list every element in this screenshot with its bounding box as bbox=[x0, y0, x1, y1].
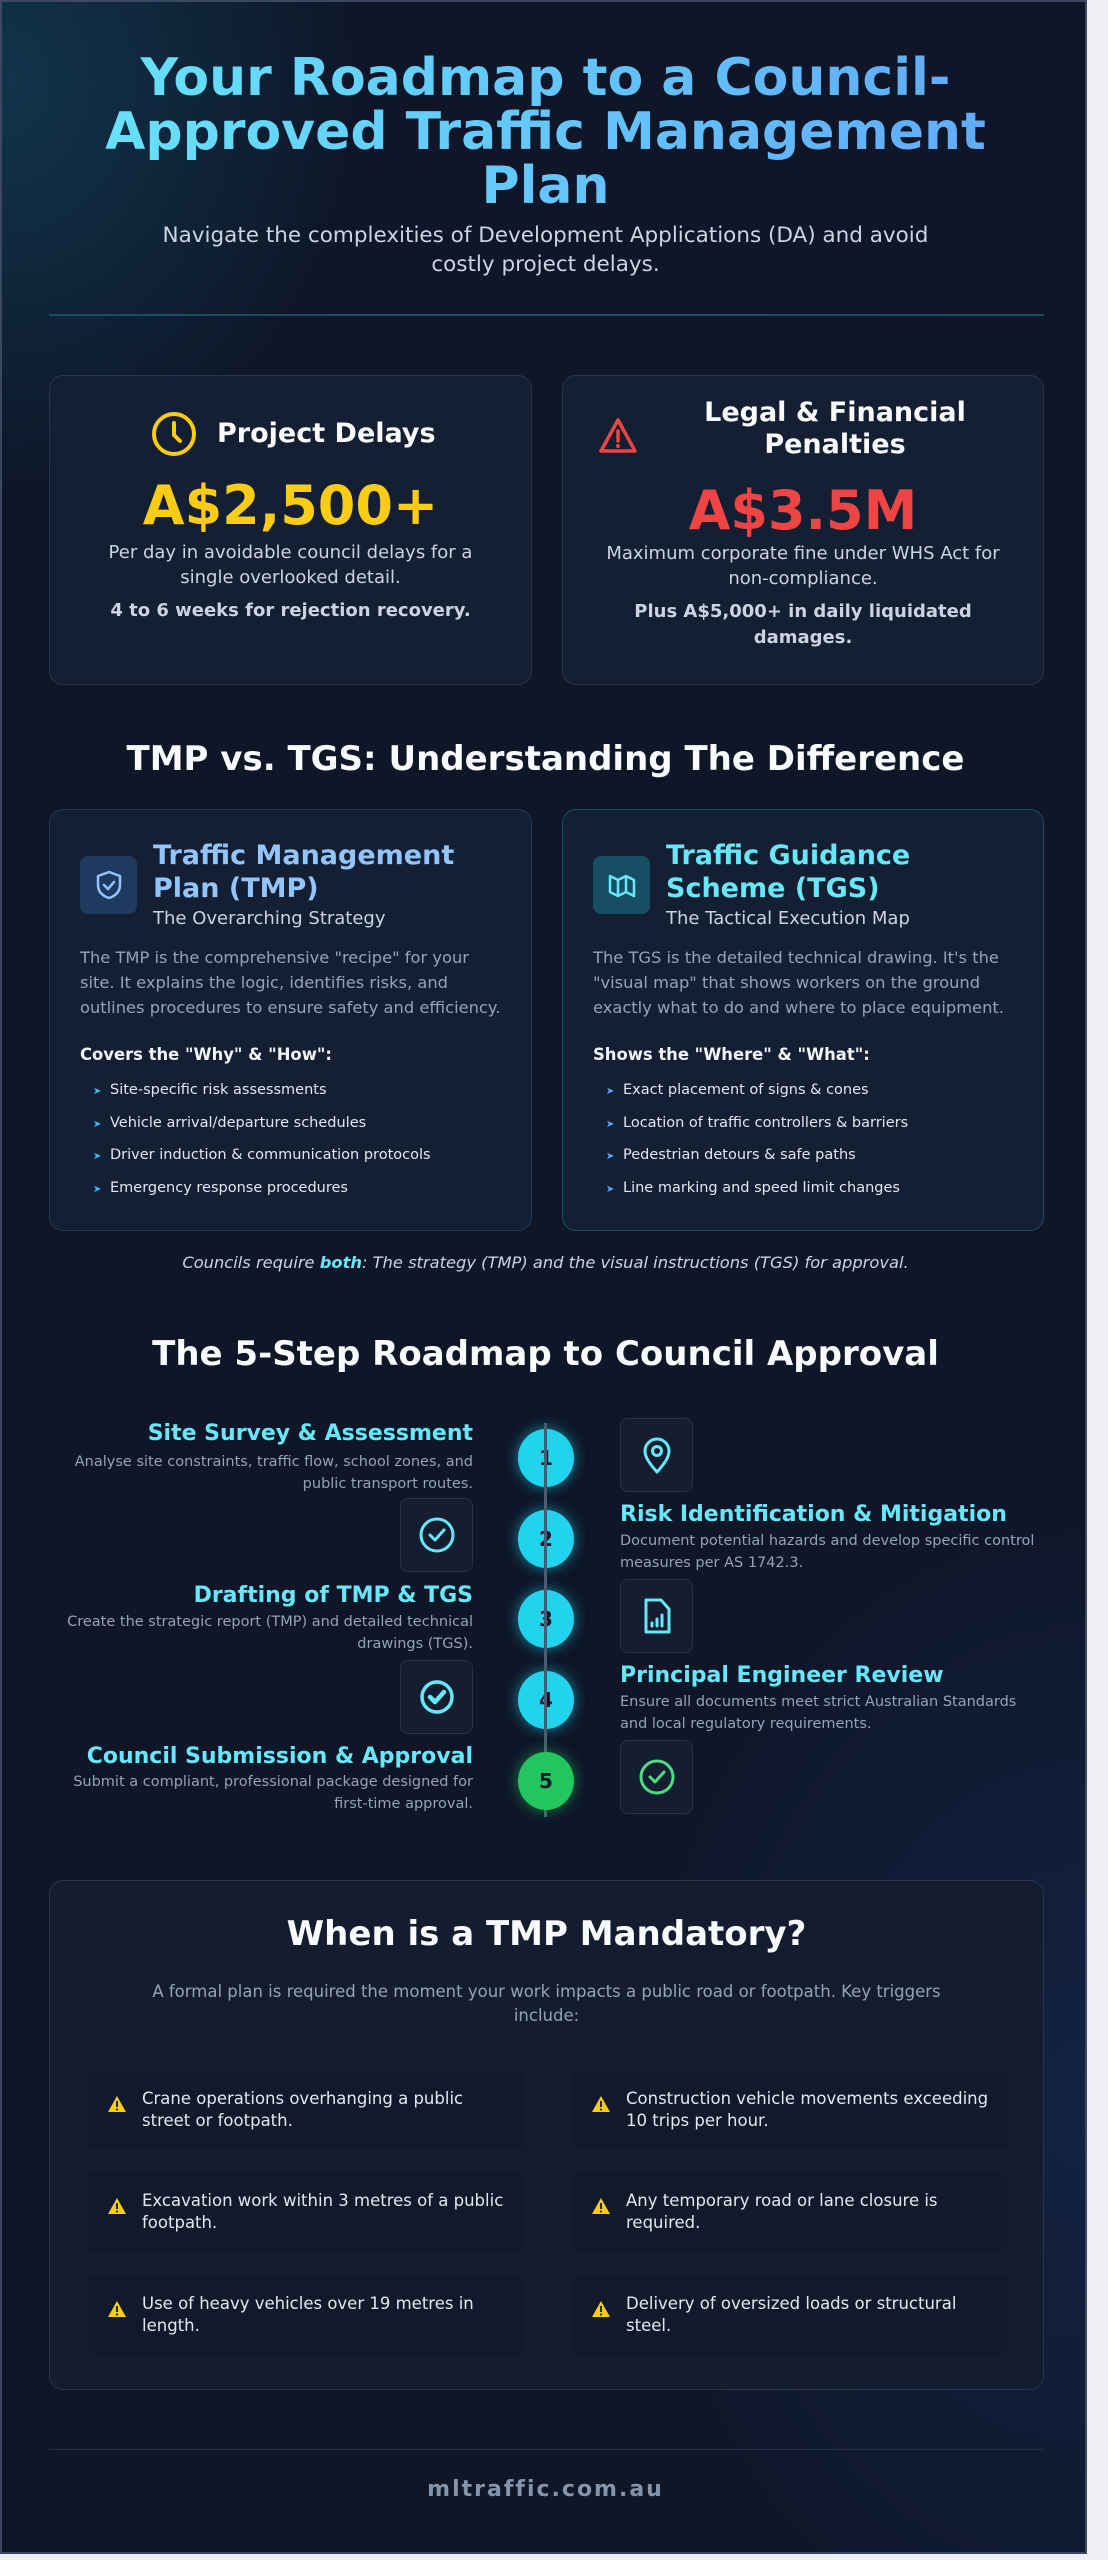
timeline bbox=[509, 1420, 583, 1818]
heading: Legal & Financial bbox=[704, 397, 966, 428]
timeline: 4 bbox=[539, 1688, 553, 1712]
title bbox=[2, 51, 1089, 213]
list: Exact placement of signs & cones bbox=[623, 1082, 869, 1098]
description: Maximum corporate fine under WHS Act for bbox=[606, 543, 1000, 564]
heading: Project Delays bbox=[217, 418, 436, 449]
trigger 5 bbox=[88, 2276, 525, 2354]
trigger 3 bbox=[88, 2173, 525, 2251]
intro bbox=[152, 1982, 941, 2025]
list: Vehicle arrival/departure schedules bbox=[110, 1115, 366, 1131]
step 2: measures per AS 1742.3. bbox=[620, 1555, 803, 1571]
trigger 1 bbox=[88, 2071, 525, 2149]
bold note: 4 to 6 weeks for rejection recovery. bbox=[110, 600, 471, 621]
list heading: Covers the "Why" & "How": bbox=[80, 1045, 332, 1064]
heading bbox=[666, 840, 910, 904]
trigger 1: street or footpath. bbox=[142, 2111, 293, 2130]
trigger 2: 10 trips per hour. bbox=[626, 2111, 769, 2130]
description bbox=[109, 542, 472, 588]
timeline: 5 bbox=[539, 1769, 553, 1793]
step circles bbox=[518, 1429, 574, 1487]
title: Plan bbox=[481, 156, 610, 216]
timeline: 2 bbox=[539, 1527, 553, 1551]
paragraph: site. It explains the logic, identifies risks, and bbox=[80, 973, 448, 992]
trigger 3: footpath. bbox=[142, 2213, 217, 2232]
icon: map bbox=[593, 856, 650, 914]
step 2 bbox=[620, 1502, 1034, 1571]
description: non-compliance. bbox=[728, 568, 878, 589]
step 3: drawings (TGS). bbox=[357, 1636, 473, 1652]
icon: green check bbox=[620, 1740, 693, 1814]
intro: A formal plan is required the moment your work impacts a public road or footpath. Key triggers bbox=[152, 1982, 941, 2001]
description bbox=[606, 543, 1000, 589]
paragraph bbox=[80, 948, 500, 1017]
bold note: damages. bbox=[754, 627, 852, 648]
list: Pedestrian detours & safe paths bbox=[623, 1147, 856, 1163]
list heading: Shows the "Where" & "What": bbox=[593, 1045, 870, 1064]
step 1: public transport routes. bbox=[303, 1476, 473, 1492]
icon: shield bbox=[80, 856, 137, 914]
step 1: Site Survey & Assessment bbox=[148, 1421, 473, 1446]
panel: TMP bbox=[49, 809, 532, 1231]
step 4: Principal Engineer Review bbox=[620, 1663, 944, 1688]
list: ➤ bbox=[93, 1086, 101, 1097]
timeline: 3 bbox=[539, 1607, 553, 1631]
footnote: Councils require both: The strategy (TMP) and the visual instructions (TGS) for approval. bbox=[182, 1253, 909, 1272]
heading: Scheme (TGS) bbox=[666, 873, 880, 904]
step 3: Drafting of TMP & TGS bbox=[194, 1583, 473, 1608]
heading: Penalties bbox=[764, 429, 906, 460]
icon: document chart bbox=[620, 1579, 693, 1653]
list: Driver induction & communication protocols bbox=[110, 1147, 431, 1163]
icon: warning bbox=[599, 418, 637, 453]
step 5: Submit a compliant, professional package designed for bbox=[73, 1774, 473, 1790]
list: Emergency response procedures bbox=[110, 1180, 348, 1196]
step 3 bbox=[67, 1583, 473, 1652]
step 4: Ensure all documents meet strict Australian Standards bbox=[620, 1694, 1016, 1710]
trigger 4: required. bbox=[626, 2213, 700, 2232]
stat number: A$2,500+ bbox=[143, 474, 438, 537]
subtitle bbox=[163, 223, 928, 277]
heading: Traffic Guidance bbox=[666, 840, 910, 871]
list: ➤ bbox=[93, 1184, 101, 1195]
subtitle: Navigate the complexities of Development Applications (DA) and avoid bbox=[163, 223, 928, 248]
title: Your Roadmap to a Council- bbox=[141, 48, 950, 108]
icon: clock bbox=[152, 412, 196, 456]
paragraph bbox=[592, 948, 1004, 1017]
icon: location pin bbox=[620, 1418, 693, 1492]
trigger 4: Any temporary road or lane closure is bbox=[626, 2191, 938, 2210]
list: ➤ bbox=[606, 1086, 614, 1097]
icon: check circle bbox=[400, 1498, 473, 1572]
heading: Traffic Management bbox=[153, 840, 454, 871]
heading: Plan (TMP) bbox=[153, 873, 319, 904]
list: Site-specific risk assessments bbox=[110, 1082, 327, 1098]
paragraph: The TGS is the detailed technical drawing. It's the bbox=[593, 948, 999, 967]
panel: TGS bbox=[562, 809, 1044, 1231]
icon: check badge bbox=[400, 1660, 473, 1734]
step circles: 1 bbox=[539, 1446, 553, 1470]
trigger 6: Delivery of oversized loads or structural bbox=[626, 2294, 956, 2313]
paragraph: The TMP is the comprehensive "recipe" for your bbox=[80, 948, 469, 967]
step 1: Analyse site constraints, traffic flow, school zones, and bbox=[75, 1454, 473, 1470]
trigger 2 bbox=[572, 2071, 1007, 2149]
list: ➤ bbox=[606, 1119, 614, 1130]
bold note bbox=[634, 601, 972, 648]
step 4: and local regulatory requirements. bbox=[620, 1716, 872, 1732]
list: ➤ bbox=[93, 1151, 101, 1162]
step 5: Council Submission & Approval bbox=[87, 1744, 473, 1769]
subtitle: costly project delays. bbox=[431, 252, 660, 277]
heading: roadmap: The 5-Step Roadmap to Council Approval bbox=[152, 1334, 939, 1374]
trigger 3: Excavation work within 3 metres of a public bbox=[142, 2191, 503, 2210]
panel: when is a TMP mandatory bbox=[49, 1880, 1044, 2390]
step 1 bbox=[74, 1421, 473, 1492]
step 2: Document potential hazards and develop specific control bbox=[620, 1533, 1034, 1549]
step 3: Create the strategic report (TMP) and detailed technical bbox=[67, 1614, 473, 1630]
paragraph: "visual map" that shows workers on the ground bbox=[593, 973, 980, 992]
paragraph: outlines procedures to ensure safety and efficiency. bbox=[80, 998, 500, 1017]
heading bbox=[704, 397, 966, 460]
bold note: Plus A$5,000+ in daily liquidated bbox=[634, 601, 972, 622]
step 5: first-time approval. bbox=[334, 1796, 473, 1812]
heading: When is a TMP Mandatory? bbox=[287, 1914, 806, 1954]
trigger 6 bbox=[572, 2276, 1007, 2354]
list: Line marking and speed limit changes bbox=[623, 1180, 900, 1196]
list: Location of traffic controllers & barriers bbox=[623, 1115, 908, 1131]
description: Per day in avoidable council delays for a bbox=[109, 542, 472, 563]
title: Approved Traffic Management bbox=[105, 102, 986, 162]
step 4 bbox=[620, 1663, 1016, 1732]
heading bbox=[153, 840, 454, 904]
intro: include: bbox=[514, 2006, 579, 2025]
trigger 6: steel. bbox=[626, 2316, 671, 2335]
stat number: A$3.5M bbox=[689, 479, 917, 542]
list: ➤ bbox=[606, 1184, 614, 1195]
list bbox=[606, 1082, 908, 1196]
subheading: The Overarching Strategy bbox=[153, 908, 386, 929]
trigger 5: Use of heavy vehicles over 19 metres in bbox=[142, 2294, 474, 2313]
paragraph: exactly what to do and where to place equipment. bbox=[593, 998, 1004, 1017]
subheading: The Tactical Execution Map bbox=[666, 908, 910, 929]
heading: TMP vs TGS: TMP vs. TGS: Understanding The Difference bbox=[127, 739, 964, 779]
list: ➤ bbox=[93, 1119, 101, 1130]
trigger 5: length. bbox=[142, 2316, 200, 2335]
step 2: Risk Identification & Mitigation bbox=[620, 1502, 1007, 1527]
panel: project delays bbox=[49, 375, 532, 685]
panel: legal penalties bbox=[562, 375, 1044, 685]
trigger 2: Construction vehicle movements exceeding bbox=[626, 2089, 988, 2108]
trigger 4 bbox=[572, 2173, 1007, 2251]
list: ➤ bbox=[606, 1151, 614, 1162]
step 5 bbox=[73, 1744, 473, 1812]
footer: mltraffic.com.au bbox=[427, 2477, 664, 2502]
list bbox=[93, 1082, 431, 1196]
trigger 1: Crane operations overhanging a public bbox=[142, 2089, 463, 2108]
description: single overlooked detail. bbox=[180, 567, 401, 588]
